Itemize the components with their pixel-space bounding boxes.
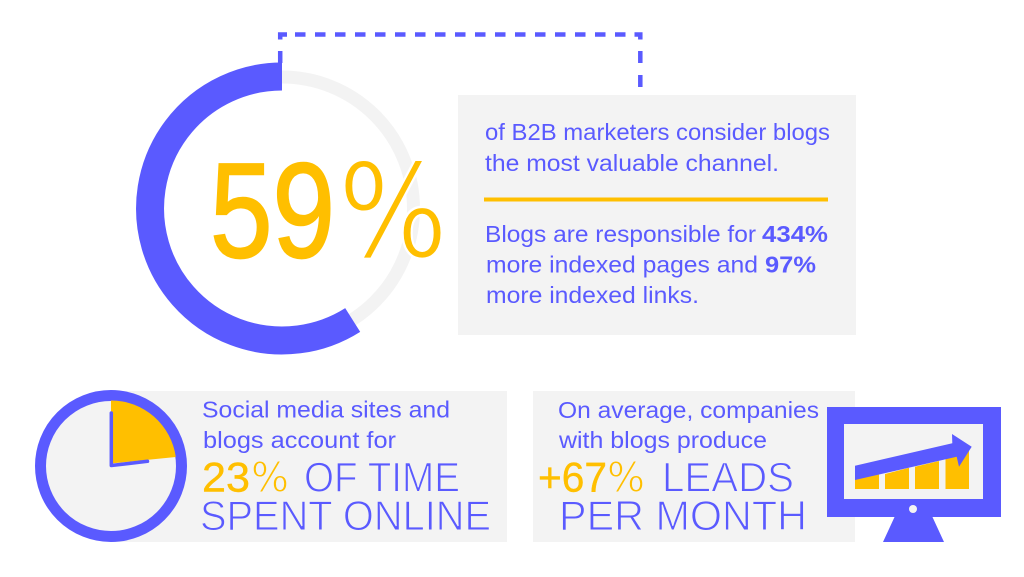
text: companies with blogs: with blogs produce [558,427,767,453]
text: social media sites [202,396,450,453]
arrow [855,434,972,480]
panel background [458,95,856,335]
headline: 23% of time spent online: OF TIME [304,454,460,500]
big number 59% [210,135,448,288]
power button [909,505,917,513]
text: companies with blogs: On average, companies [558,397,819,423]
divider [484,198,828,202]
text: valuable channel: the most valuable channel. [485,150,779,176]
text: social media sites: blogs account for [203,427,396,453]
text: indexed pages and links: more indexed pages and [486,252,758,278]
panel background [111,391,507,542]
panel background [533,391,855,542]
text: indexed pages and links: Blogs are responsible for [485,221,756,247]
text: indexed pages and links [485,221,828,308]
text: social media sites: Social media sites and [202,396,450,422]
big number 59%: 59 [210,135,335,286]
headline: +67% leads per month: PER MONTH [559,492,807,539]
icon: monitor with rising chart [827,407,1001,542]
text: indexed pages and links: more indexed links. [486,282,699,308]
panel: leads per month [533,391,855,542]
icon: clock [40,396,182,536]
text: indexed pages and links: 97% [765,252,816,278]
headline: +67% leads per month: LEADS [662,454,794,500]
text: valuable channel [485,119,830,176]
panel: time spent online [40,391,507,542]
text: companies with blogs [558,397,819,453]
monitor screen [844,424,983,499]
headline: 23% of time spent online [200,454,491,539]
text: indexed pages and links: 434% [762,221,828,247]
donut value arc [150,76,353,340]
panel: B2B marketers [458,95,856,335]
headline: +67% leads per month: % [607,454,645,502]
headline: 23% of time spent online: 23 [202,454,250,500]
monitor frame [827,407,1001,517]
text: valuable channel: of B2B marketers consider blogs [485,119,830,145]
headline: 23% of time spent online: % [251,454,289,502]
panel: 59 percent donut [150,34,640,340]
donut track [150,77,414,340]
big number 59%: % [338,135,448,288]
headline: +67% leads per month [538,454,807,539]
headline: +67% leads per month: +67 [538,454,607,500]
dashed connector [280,34,640,95]
monitor stand [883,516,944,542]
headline: 23% of time spent online: SPENT ONLINE [200,492,491,539]
bar chart [855,450,969,489]
